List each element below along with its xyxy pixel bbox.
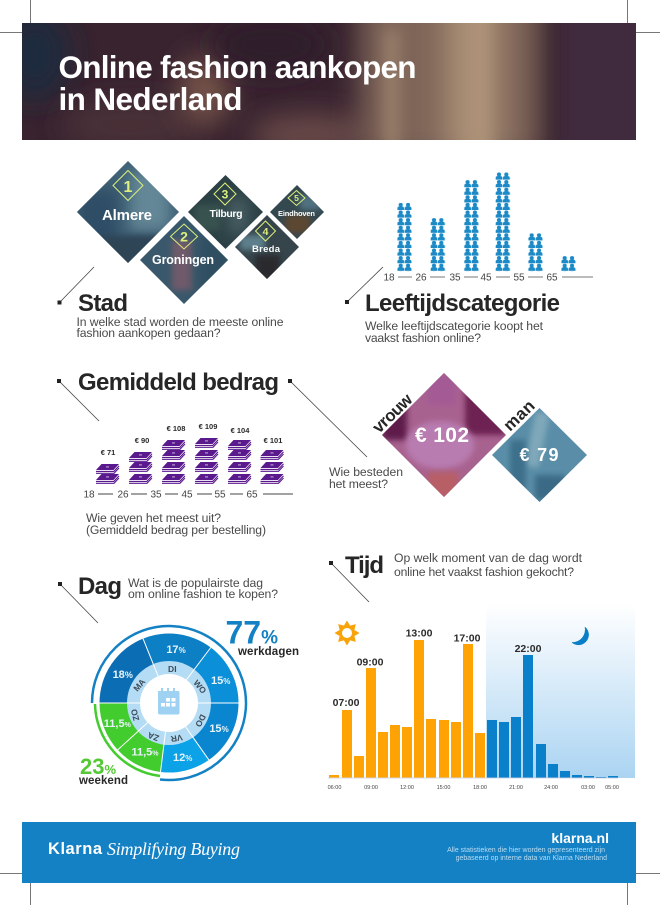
panel: vrouw en man <box>288 373 587 502</box>
icon: calendar <box>158 688 180 714</box>
link: klarna.nl: klarna.nl <box>551 830 609 846</box>
pointer: dag <box>58 582 98 623</box>
chart: people per age group: 18 <box>383 272 395 284</box>
chart: orders per hour: 17:00 <box>454 632 481 644</box>
label: man: man <box>500 396 539 435</box>
chart: donut per weekday: 12% <box>173 752 192 764</box>
chart: orders per hour: 09:00 <box>357 656 384 668</box>
text: disclaimer: gebaseerd op interne data van Klarna Nederland <box>456 855 607 862</box>
chart: donut per weekday <box>92 626 246 780</box>
diamond: vrouw: € 102 <box>415 424 469 447</box>
chart: donut per weekday: ZA <box>146 730 160 743</box>
title: in Nederland <box>58 81 242 117</box>
heading: Stad: Stad <box>78 290 128 317</box>
chart: average amount per age group: 65 <box>246 490 258 500</box>
chart: orders per hour: 24:00 <box>544 785 558 791</box>
night background <box>486 604 635 778</box>
diamond: Groningen: Groningen <box>152 253 214 267</box>
chart: donut per weekday: 17% <box>166 644 186 656</box>
diamond: Almere <box>77 161 179 265</box>
chart: orders per hour: 21:00 <box>509 785 523 791</box>
chart: average amount per age group: € 109 <box>199 422 217 431</box>
chart: average amount per age group: 35 <box>150 490 162 500</box>
chart: donut per weekday: DO <box>193 713 208 729</box>
chart: average amount per age group: € 90 <box>135 436 149 445</box>
chart: people per age group: 35 <box>449 272 461 284</box>
chart: donut per weekday: 15% <box>209 723 229 735</box>
label: vrouw: vrouw <box>369 389 417 437</box>
chart: donut per weekday: DI <box>168 664 177 674</box>
chart: orders per hour: 05:00 <box>605 785 619 791</box>
heading: Gemiddeld bedrag: Gemiddeld bedrag <box>78 369 279 396</box>
diamond: Eindhoven: Eindhoven <box>278 209 315 218</box>
diamond: Breda: Breda <box>252 244 281 255</box>
diamond: Eindhoven <box>270 185 324 239</box>
chart: average amount per age group: 26 <box>117 490 129 500</box>
text: leeftijd question: Welke leeftijdscategorie koopt het <box>365 319 544 333</box>
text: leeftijd question: vaakst fashion online? <box>365 331 481 345</box>
heading: Dag: Dag <box>78 573 122 600</box>
footer banner <box>22 822 636 883</box>
panel: tijd <box>328 551 635 791</box>
chart: people per age group <box>383 172 593 284</box>
chart: donut per weekday: 15% <box>211 675 230 687</box>
icon: sun <box>334 620 360 646</box>
diamond: Almere: 1 <box>124 179 133 196</box>
stat: 23% weekend <box>78 754 128 787</box>
icon: moon <box>572 627 589 645</box>
text: dag question: Wat is de populairste dag <box>128 576 263 590</box>
text: gemiddeld bedrag question: Wie geven het meest uit? <box>86 511 221 525</box>
panel: dag <box>58 573 299 787</box>
diamond: Eindhoven: 5 <box>294 193 299 203</box>
stat: 77% werkdagen <box>226 614 299 658</box>
heading: Leeftijdscategorie: Leeftijdscategorie <box>365 290 560 317</box>
diamond: man <box>492 408 587 502</box>
diamond: Almere: Almere <box>102 207 152 224</box>
chart: donut per weekday: VR <box>170 732 183 744</box>
text: dag question: om online fashion te kopen? <box>128 587 278 601</box>
pointer: stad <box>58 267 94 304</box>
chart: average amount per age group: € 71 <box>101 448 115 457</box>
chart: orders per hour: 18:00 <box>473 785 487 791</box>
panel: leeftijdscategorie <box>345 172 593 345</box>
chart: average amount per age group <box>83 422 293 500</box>
diamond: Breda: 4 <box>263 226 269 238</box>
diamond: Tilburg <box>188 175 263 249</box>
chart: orders per hour: 13:00 <box>406 628 433 640</box>
pointer: tijd <box>329 561 369 602</box>
chart: orders per hour: 03:00 <box>581 785 595 791</box>
heading: Tijd: Tijd <box>345 552 384 579</box>
text: wie besteden: het meest? <box>329 477 388 491</box>
chart: people per age group: 65 <box>546 272 558 284</box>
pointer: leeftijd <box>345 267 383 304</box>
chart: average amount per age group: 45 <box>181 490 193 500</box>
chart: orders per hour: 06:00 <box>328 785 341 791</box>
chart: average amount per age group: 18 <box>83 490 95 500</box>
text: wie besteden: Wie besteden <box>329 465 403 479</box>
title: Online fashion aankopen <box>58 49 416 85</box>
text: disclaimer: Alle statistieken die hier worden gepresenteerd zijn <box>447 847 605 854</box>
chart: orders per hour: 07:00 <box>333 697 360 709</box>
header banner <box>22 23 636 140</box>
chart: orders per hour <box>328 628 619 791</box>
chart: average amount per age group: € 108 <box>167 424 185 433</box>
chart: average amount per age group: 55 <box>214 490 226 500</box>
text: tijd question: online het vaakst fashion gekocht? <box>394 565 574 579</box>
diamond: Groningen: 2 <box>180 228 188 244</box>
diamond: Groningen <box>140 216 230 304</box>
chart: people per age group: 26 <box>415 272 427 284</box>
diamond: Tilburg: 3 <box>222 188 229 202</box>
pointer: gemiddeld bedrag <box>57 379 99 421</box>
chart: average amount per age group: € 104 <box>231 426 250 435</box>
chart: people per age group: 45 <box>480 272 492 284</box>
chart: donut per weekday: ZO <box>129 708 141 722</box>
chart: orders per hour: 12:00 <box>400 785 414 791</box>
stat: 23% weekend: 23% <box>80 754 116 779</box>
stat: 77% werkdagen: 77% <box>226 614 278 650</box>
diamond: vrouw <box>382 373 506 498</box>
text: tijd question: Op welk moment van de dag wordt <box>394 551 583 565</box>
chart: orders per hour: 15:00 <box>437 785 450 791</box>
diamond: Breda <box>235 215 299 280</box>
stat: 23% weekend: weekend <box>78 775 128 787</box>
chart: donut per weekday: 11,5% <box>104 718 132 730</box>
chart: orders per hour: 22:00 <box>515 643 542 655</box>
chart: donut per weekday: 18% <box>113 669 133 681</box>
tagline: Simplifying Buying <box>107 839 240 859</box>
diamond: man: € 79 <box>520 445 558 465</box>
chart: orders per hour: 09:00 <box>364 785 378 791</box>
text: gemiddeld bedrag question: (Gemiddeld bedrag per bestelling) <box>86 523 266 537</box>
chart: donut per weekday: 11,5% <box>131 746 159 758</box>
logo: Klarna: Klarna <box>48 840 103 858</box>
panel: gemiddeld bedrag <box>57 369 293 537</box>
chart: average amount per age group: € 101 <box>264 436 282 445</box>
text: stad question: fashion aankopen gedaan? <box>76 326 221 340</box>
panel: stad <box>58 161 324 340</box>
stat: 77% werkdagen: werkdagen <box>237 646 299 658</box>
text: stad question: In welke stad worden de meeste online <box>76 315 284 329</box>
pointer: vrouw/man <box>288 379 367 457</box>
chart: donut per weekday: MA <box>131 677 147 693</box>
chart: donut per weekday: WO <box>191 678 209 696</box>
diamond: Tilburg: Tilburg <box>210 208 242 220</box>
chart: people per age group: 55 <box>513 272 525 284</box>
